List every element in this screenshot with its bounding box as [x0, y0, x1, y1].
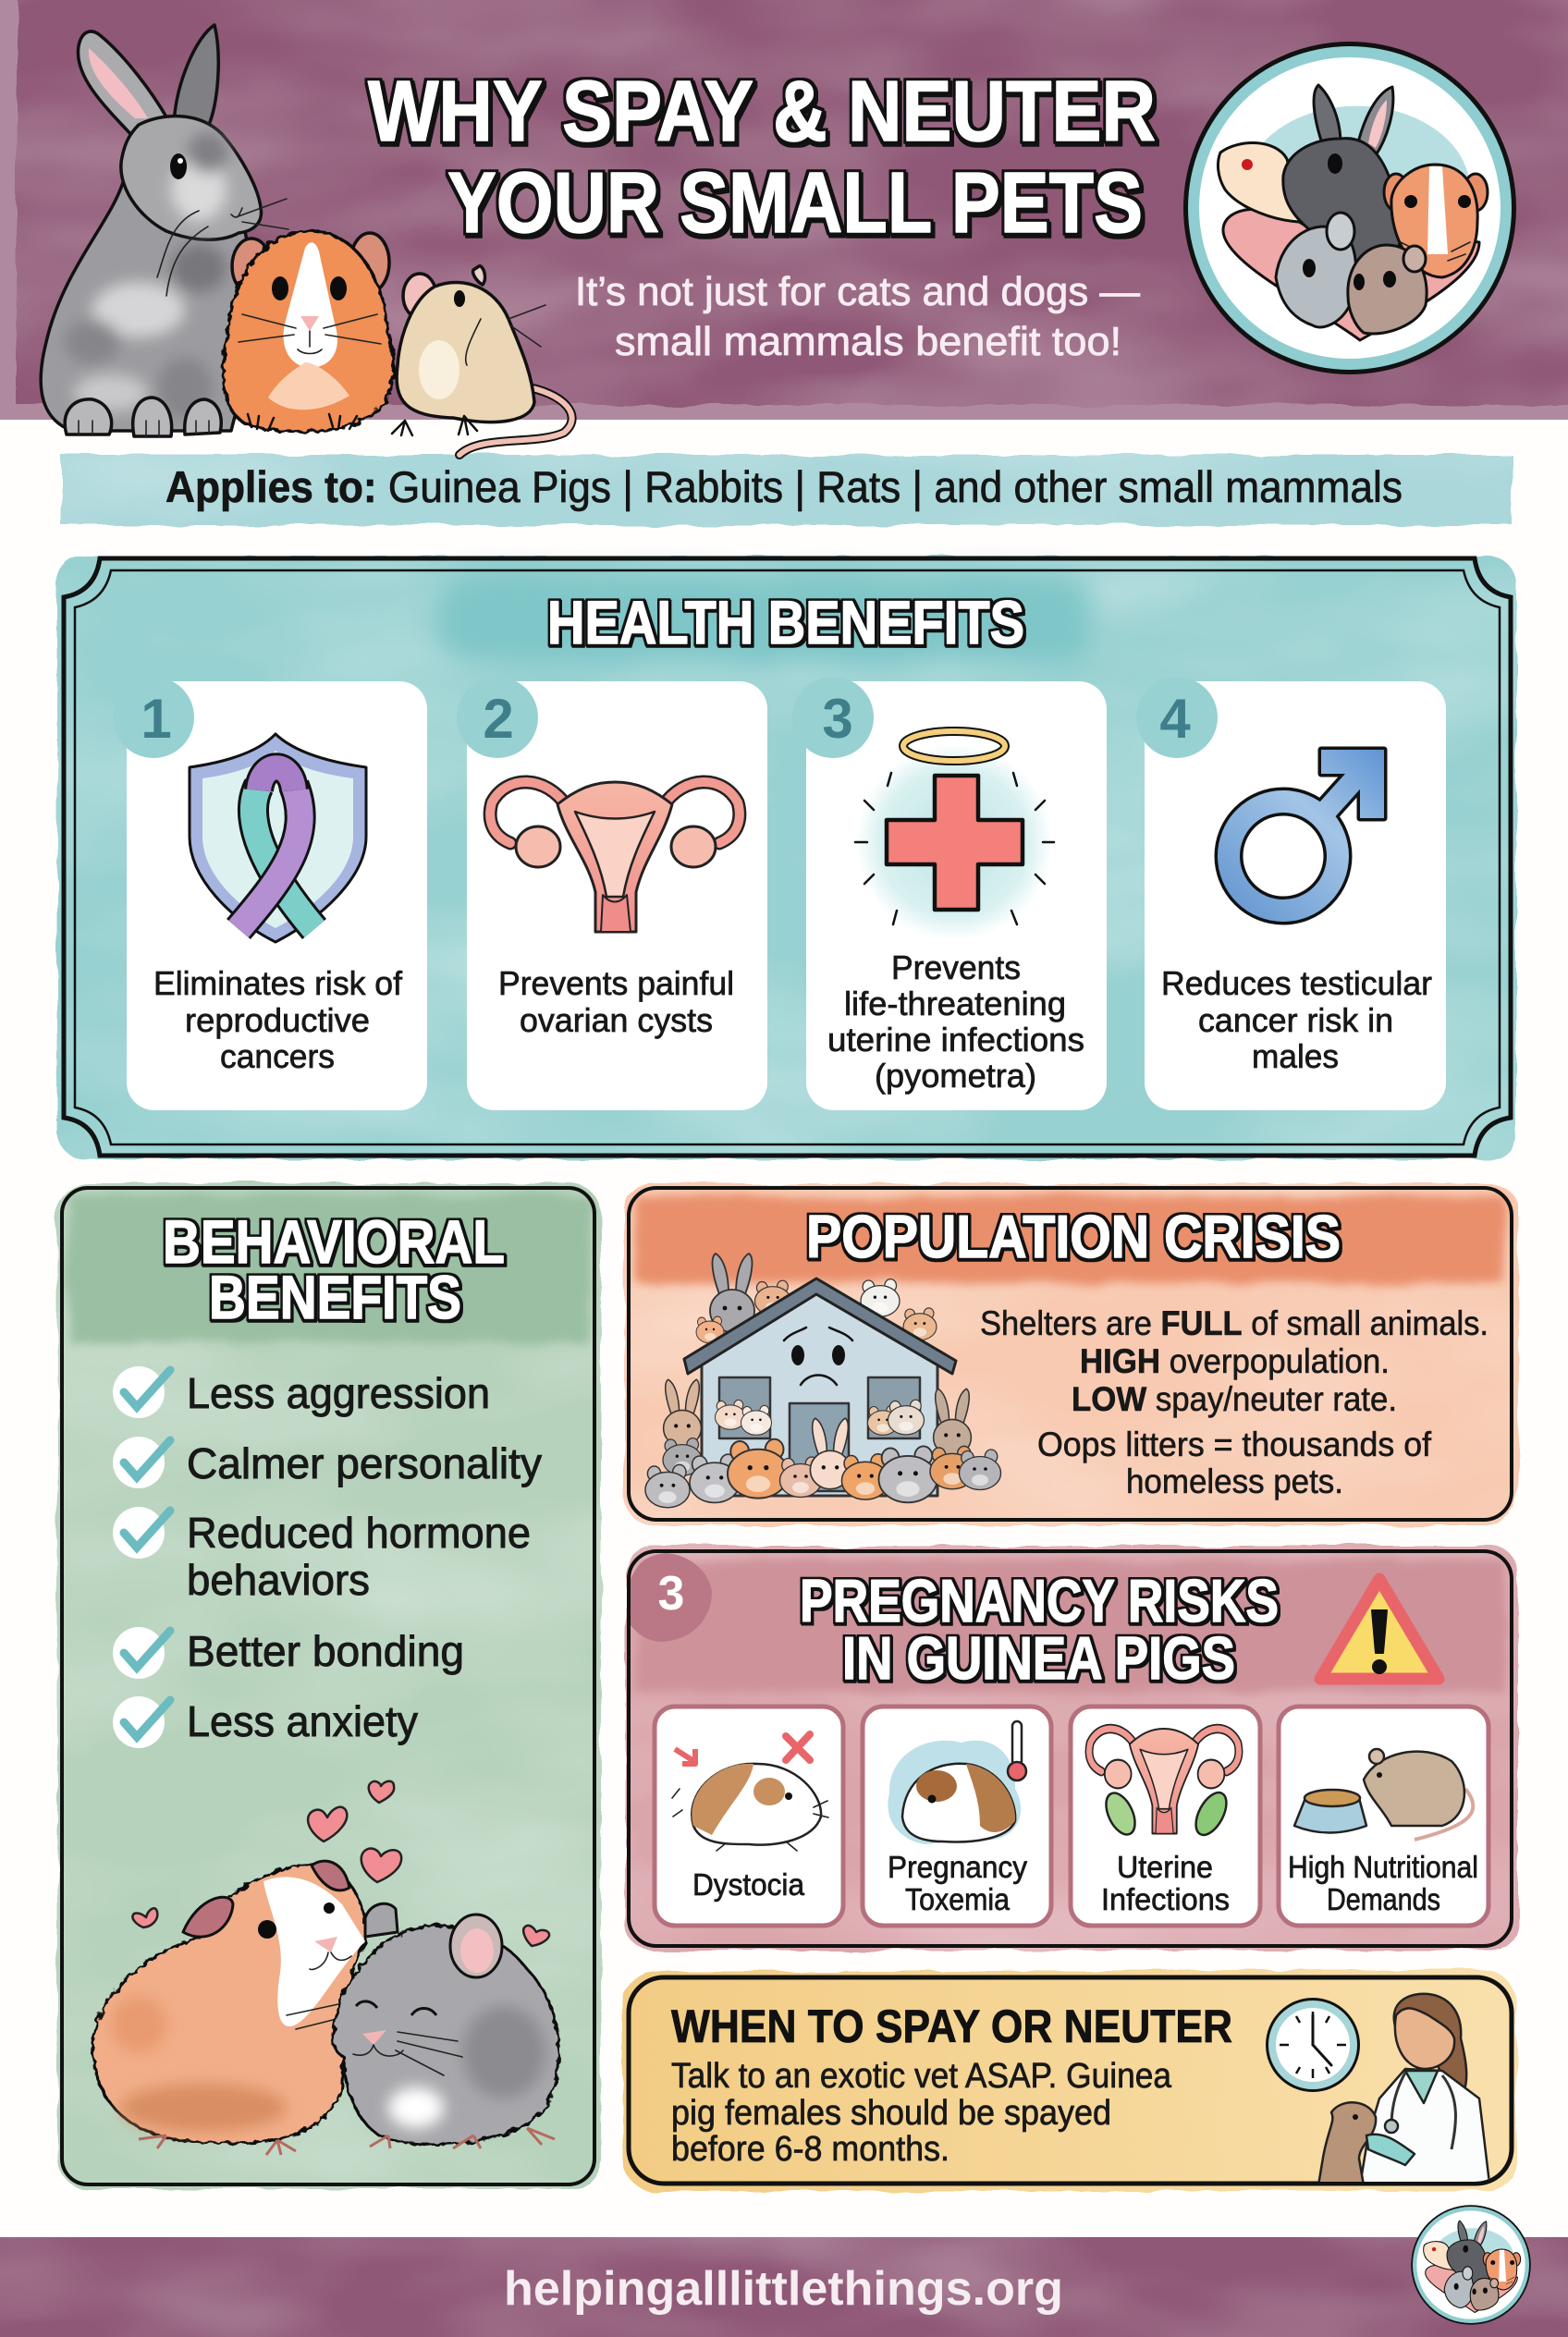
card 2 text: Prevents painful [498, 964, 734, 1002]
card 3 text [827, 948, 1084, 1095]
icon: male symbol [1229, 750, 1384, 911]
rabbit [41, 25, 288, 436]
heading band [636, 1560, 1505, 1692]
card 3 text: (pyometra) [875, 1057, 1036, 1095]
badge 2: 2 [483, 688, 514, 750]
check 3 [113, 1507, 170, 1559]
panel wash [623, 1971, 1516, 2191]
border [629, 1977, 1512, 2184]
heading: HEALTH BENEFITS [547, 588, 1024, 656]
icon: logo medallion [1183, 42, 1516, 374]
card 1 text: cancers [220, 1037, 335, 1075]
population text [980, 1304, 1488, 1500]
applies-to banner [61, 455, 1513, 525]
banner text: Applies to: Guinea Pigs | Rabbits | Rats | and other small mammals [165, 462, 1403, 511]
check 1 [113, 1366, 170, 1418]
list text: Reduced hormone [187, 1509, 531, 1557]
guinea pig [92, 1861, 365, 2155]
subtitle: It’s not just for cats and dogs — [575, 269, 1140, 314]
number badge [631, 1553, 712, 1642]
card 1 [113, 677, 427, 1110]
card 2 [457, 677, 767, 1110]
icon: warning triangle [1320, 1579, 1439, 1679]
population text: HIGH overpopulation. [1080, 1342, 1390, 1380]
list text [187, 1369, 542, 1745]
card 4 [1136, 677, 1446, 1110]
icon: guinea pig with arrow and x [672, 1734, 828, 1851]
footer band [0, 2205, 1568, 2337]
population text: homeless pets. [1126, 1462, 1343, 1500]
frame [64, 558, 1511, 1156]
house [684, 1279, 956, 1496]
icon: shield with ribbon [190, 734, 366, 942]
hearts [132, 1781, 549, 1946]
card 3 text: Prevents [891, 948, 1021, 986]
label [1288, 1850, 1478, 1916]
icon: uterus with bacteria [1089, 1729, 1239, 1840]
card 2 text: ovarian cysts [520, 1001, 713, 1039]
border [629, 1551, 1512, 1946]
body text: pig females should be spayed [671, 2094, 1111, 2133]
population text: Shelters are FULL of small animals. [980, 1304, 1488, 1342]
card: pregnancy toxemia [863, 1707, 1051, 1926]
card: dystocia [655, 1707, 843, 1926]
label: Infections [1101, 1882, 1230, 1916]
check 5 [113, 1696, 170, 1748]
badge 1: 1 [141, 688, 172, 750]
card: uterine infections [1071, 1707, 1260, 1926]
heading band [444, 575, 1091, 664]
card 2 text [498, 964, 734, 1039]
subtitle: small mammals benefit too! [615, 319, 1121, 364]
population text: LOW spay/neuter rate. [1072, 1380, 1397, 1418]
guinea pig [223, 231, 394, 432]
list text: Less aggression [187, 1369, 490, 1417]
label: Uterine [1117, 1850, 1213, 1884]
card 4 text: males [1252, 1037, 1339, 1075]
label: Demands [1327, 1882, 1440, 1916]
border [629, 1188, 1512, 1520]
list text: Less anxiety [187, 1697, 418, 1745]
icon: guinea pig with thermometer [888, 1721, 1026, 1844]
card: high nutritional demands [1279, 1707, 1488, 1926]
title: WHY SPAY & NEUTER [368, 63, 1156, 159]
icon: clock [1266, 1998, 1360, 2092]
icon: medical cross with halo [855, 731, 1054, 940]
panel wash [57, 1183, 601, 2189]
badge 1 [113, 677, 194, 758]
panel: pregnancy risks [625, 1546, 1518, 1951]
panel wash [625, 1183, 1518, 1525]
subtitle [575, 269, 1140, 364]
roof critters [696, 1254, 937, 1343]
border [62, 1188, 594, 2184]
panel: behavioral benefits [57, 1183, 601, 2189]
list text: Calmer personality [187, 1439, 542, 1487]
number badge: 3 [658, 1567, 684, 1621]
list text: Better bonding [187, 1627, 464, 1675]
crowd of pets [645, 1379, 1000, 1508]
panel: health benefits [57, 557, 1516, 1159]
heading: BEHAVIORAL [163, 1207, 505, 1276]
label: Pregnancy [888, 1850, 1027, 1884]
label: Dystocia [692, 1867, 805, 1902]
panel wash [625, 1546, 1518, 1951]
icon: rat and food bowl [1294, 1749, 1473, 1840]
check 4 [113, 1627, 170, 1679]
heading [163, 1207, 505, 1331]
badge 3: 3 [822, 688, 853, 750]
label [1101, 1850, 1230, 1916]
illustration: vet holding a small pet [1317, 1994, 1490, 2191]
badge 4 [1136, 677, 1218, 758]
badge 4: 4 [1159, 688, 1191, 750]
label: Toxemia [905, 1882, 1011, 1916]
heading: PREGNANCY RISKS [800, 1567, 1279, 1634]
illustration: overcrowded house [645, 1254, 1000, 1508]
body text: Talk to an exotic vet ASAP. Guinea [671, 2057, 1172, 2096]
website: helpingalllittlethings.org [504, 2262, 1063, 2316]
card 3 [792, 677, 1107, 1110]
body text: before 6-8 months. [671, 2130, 949, 2169]
card 4 text [1161, 964, 1432, 1075]
panel: population crisis [625, 1183, 1518, 1525]
rat tail [459, 386, 572, 455]
heading band [68, 1194, 588, 1342]
card 1 text: Eliminates risk of [153, 964, 403, 1002]
illustration: rabbit, guinea pig and rat [41, 25, 545, 436]
body text [671, 2057, 1172, 2169]
icon: uterus [490, 782, 740, 932]
title: YOUR SMALL PETS [447, 154, 1143, 251]
card 4 text: Reduces testicular [1161, 964, 1432, 1002]
window critters [716, 1400, 925, 1435]
heading: IN GUINEA PIGS [842, 1624, 1235, 1692]
banner wash [61, 455, 1513, 525]
heading: BENEFITS [209, 1263, 461, 1331]
header band [0, 0, 1568, 420]
badge 2 [457, 677, 538, 758]
card 1 text: reproductive [185, 1001, 370, 1039]
panel: when to spay or neuter [623, 1971, 1516, 2191]
list text: behaviors [187, 1556, 370, 1604]
title [368, 63, 1156, 251]
population text: Oops litters = thousands of [1037, 1425, 1432, 1463]
badge 3 [792, 677, 874, 758]
card 1 text [153, 964, 403, 1075]
heading: POPULATION CRISIS [806, 1203, 1341, 1270]
panel wash [57, 557, 1516, 1159]
check 2 [113, 1437, 170, 1488]
grey rat [333, 1903, 558, 2148]
card 3 text: uterine infections [827, 1021, 1084, 1058]
heading band [636, 1196, 1505, 1283]
label [888, 1850, 1027, 1916]
heading: WHEN TO SPAY OR NEUTER [671, 2001, 1232, 2052]
icon: small logo medallion [1411, 2205, 1531, 2325]
heading [800, 1567, 1279, 1692]
checklist [113, 1366, 542, 1748]
card 4 text: cancer risk in [1198, 1001, 1393, 1039]
illustration: cuddling guinea pig and rat [92, 1861, 558, 2155]
label: High Nutritional [1288, 1850, 1478, 1884]
rat [392, 266, 545, 435]
card 3 text: life-threatening [844, 985, 1066, 1022]
